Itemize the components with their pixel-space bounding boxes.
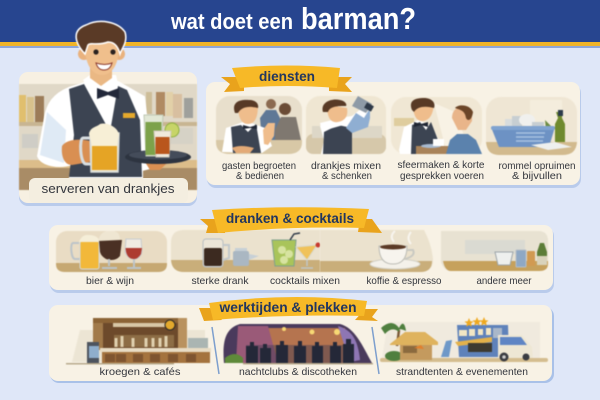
illustration: greeting guests <box>216 96 302 154</box>
service 4: rommel opruimen: rommel opruimen <box>498 160 576 172</box>
illustration: chatting with guest <box>391 97 482 154</box>
green glass <box>144 115 163 156</box>
name tag <box>123 113 135 118</box>
venue 1: kroegen & cafés <box>66 318 211 378</box>
service 2: drankjes mixen: & schenken <box>322 170 372 182</box>
drink 4: koffie & espresso <box>320 230 442 287</box>
lime <box>165 123 179 137</box>
service 1: gasten begroeten: gasten begroeten <box>222 160 296 172</box>
title: barman? <box>301 1 416 36</box>
drink 3: cocktails mixen <box>270 233 350 287</box>
illustration: beer and wine glasses <box>56 231 167 272</box>
venue 2: nachtclubs & discotheken: nachtclubs & discotheken <box>239 366 357 378</box>
illustration: coffee cup <box>320 230 433 272</box>
venue 2: nachtclubs & discotheken <box>224 324 373 378</box>
illustration: shaking a cocktail <box>306 96 386 154</box>
tray <box>125 150 191 164</box>
head <box>78 48 90 60</box>
ribbon: werktijden & plekken: werktijden & plekken <box>219 299 356 315</box>
ribbon: diensten <box>221 66 352 92</box>
service 1: gasten begroeten: & bedienen <box>236 170 284 182</box>
hand under tray <box>145 162 168 170</box>
torso and sleeves <box>38 82 150 178</box>
drink 1: bier & wijn <box>56 231 167 287</box>
drink 5: andere meer: andere meer <box>476 275 532 287</box>
venue 1: kroegen & cafés: kroegen & cafés <box>100 366 180 378</box>
bar background with shelves <box>19 84 197 190</box>
ribbon: diensten: diensten <box>259 68 315 84</box>
drink 2: sterke drank <box>171 230 320 287</box>
service 3: sfeermaken <box>391 97 485 182</box>
title <box>170 1 416 36</box>
header banner <box>0 0 600 48</box>
drink 5: andere meer <box>441 231 548 287</box>
service 2: drankjes mixen: drankjes mixen <box>311 160 381 172</box>
service 4: rommel opruimen <box>486 97 577 182</box>
caption: serveren van drankjes: serveren van drankjes <box>42 181 175 196</box>
amber glass <box>154 131 171 157</box>
divider line <box>372 327 379 374</box>
panel: dranken & cocktails <box>49 207 554 293</box>
service 3: sfeermaken: sfeermaken & korte <box>398 159 485 171</box>
drink 2: sterke drank: sterke drank <box>192 275 249 287</box>
panel: werktijden & plekken <box>49 297 554 383</box>
illustration: spirit glass and jigger <box>171 230 320 272</box>
icon: barman serving drinks <box>38 21 191 178</box>
neck <box>90 62 112 86</box>
caption: serveren van drankjes <box>29 178 188 203</box>
service 4: rommel opruimen: & bijvullen <box>512 170 562 182</box>
illustration: beach hut and food truck <box>380 317 548 362</box>
ribbon: dranken & cocktails: dranken & cocktails <box>226 210 354 226</box>
illustration: bar counter <box>66 318 211 364</box>
venue 3: strandtenten & evenementen: strandtenten & evenementen <box>396 366 528 378</box>
illustration: three cocktails <box>272 233 350 268</box>
bow tie <box>97 88 119 99</box>
illustration: cup, jars and bottle <box>441 231 548 271</box>
service 2: drankjes mixen <box>306 96 386 182</box>
drink 3: cocktails mixen: cocktails mixen <box>270 275 340 287</box>
service 3: sfeermaken: gesprekken voeren <box>400 170 484 182</box>
ribbon: werktijden & plekken <box>199 297 378 321</box>
ribbon: dranken & cocktails <box>200 207 382 233</box>
title: wat doet een <box>170 9 293 34</box>
drink 4: koffie & espresso: koffie & espresso <box>366 275 442 287</box>
illustration: basket of dishes <box>486 97 577 155</box>
venue 3: strandtenten & evenementen <box>380 317 548 378</box>
panel: serveren van drankjes <box>19 21 197 206</box>
divider line <box>212 327 219 374</box>
vest <box>69 84 142 177</box>
service 1: gasten begroeten <box>216 96 302 182</box>
drink 1: bier & wijn: bier & wijn <box>86 275 134 287</box>
panel: diensten <box>206 66 581 188</box>
illustration: nightclub crowd <box>224 324 373 364</box>
hand with mug <box>62 140 90 165</box>
